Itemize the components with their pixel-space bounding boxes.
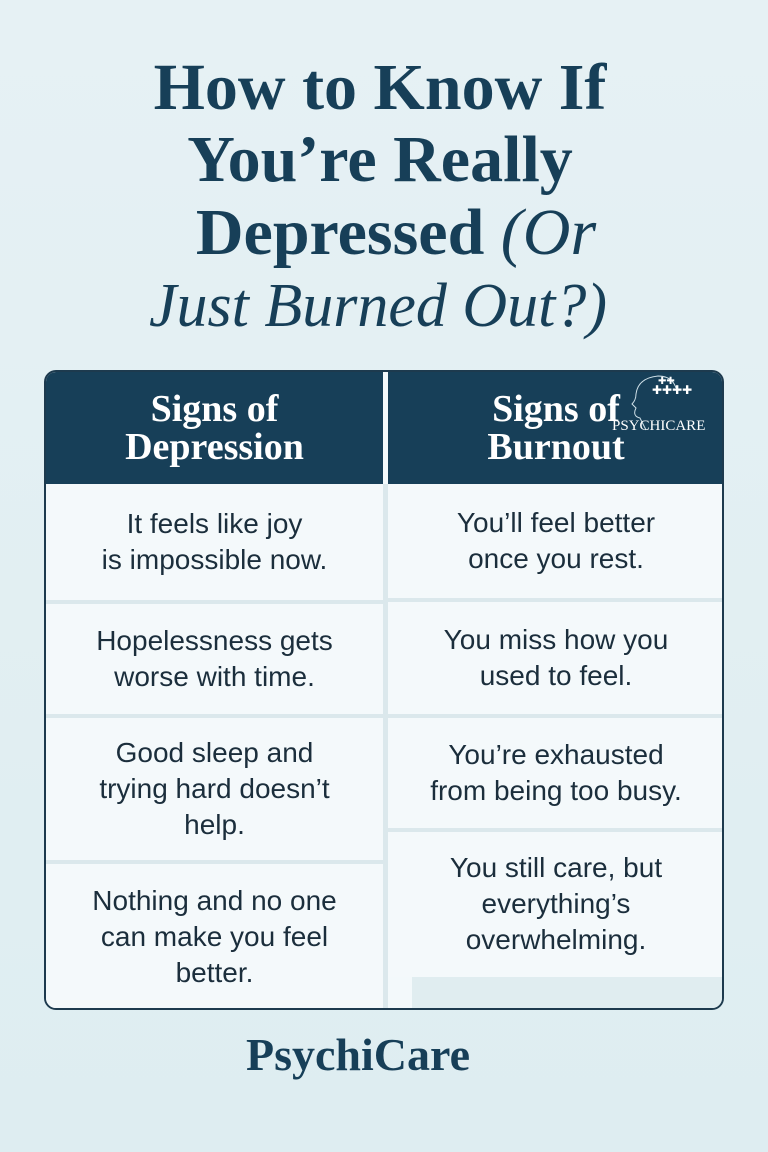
- left column cells: It feels like joy: [127, 508, 302, 539]
- logo: PsychiCare head: PSYCHICARE: [612, 418, 705, 434]
- comparison table: You’re exhausted: [448, 739, 664, 770]
- comparison table: from being too busy.: [430, 775, 682, 806]
- right column cells: [388, 484, 724, 602]
- comparison table: Good sleep and: [116, 737, 313, 768]
- title: Depressed (Or: [196, 196, 596, 269]
- title: You’re Really: [187, 123, 573, 196]
- comparison table: everything’s: [482, 888, 630, 919]
- comparison table: You miss how you: [444, 624, 668, 655]
- comparison table: can make you feel: [101, 921, 328, 952]
- comparison table: Nothing and no one: [92, 885, 337, 916]
- title: How to Know If: [154, 51, 606, 124]
- comparison table: worse with time.: [114, 661, 315, 692]
- comparison table: Hopelessness gets: [96, 625, 333, 656]
- comparison table: help.: [184, 809, 245, 840]
- comparison table: You still care, but: [450, 852, 662, 883]
- left column cells: [46, 484, 383, 604]
- header: burnout: Burnout: [487, 426, 625, 468]
- right column cells: once you rest.: [468, 543, 644, 574]
- left column cells: is impossible now.: [102, 544, 327, 575]
- footer brand: PsychiCare: [246, 1029, 470, 1080]
- column divider: [383, 484, 388, 1012]
- header: burnout: Signs of: [492, 388, 620, 430]
- header: burnout: [388, 372, 724, 484]
- logo: PsychiCare head: [612, 376, 705, 434]
- header: depression: Depression: [125, 426, 304, 468]
- title: [149, 51, 607, 340]
- header: depression: Signs of: [151, 388, 278, 430]
- comparison table: overwhelming.: [466, 924, 646, 955]
- logo: PsychiCare head: ✚✚✚✚: [652, 383, 692, 397]
- comparison table: trying hard doesn’t: [99, 773, 330, 804]
- title: Just Burned Out?): [149, 272, 607, 340]
- comparison table: better.: [176, 957, 253, 988]
- comparison table: [44, 370, 724, 1010]
- comparison table: used to feel.: [480, 660, 632, 691]
- logo: PsychiCare head: ✚✚: [658, 376, 675, 387]
- right column cells: You’ll feel better: [457, 507, 655, 538]
- header: depression: [46, 372, 383, 484]
